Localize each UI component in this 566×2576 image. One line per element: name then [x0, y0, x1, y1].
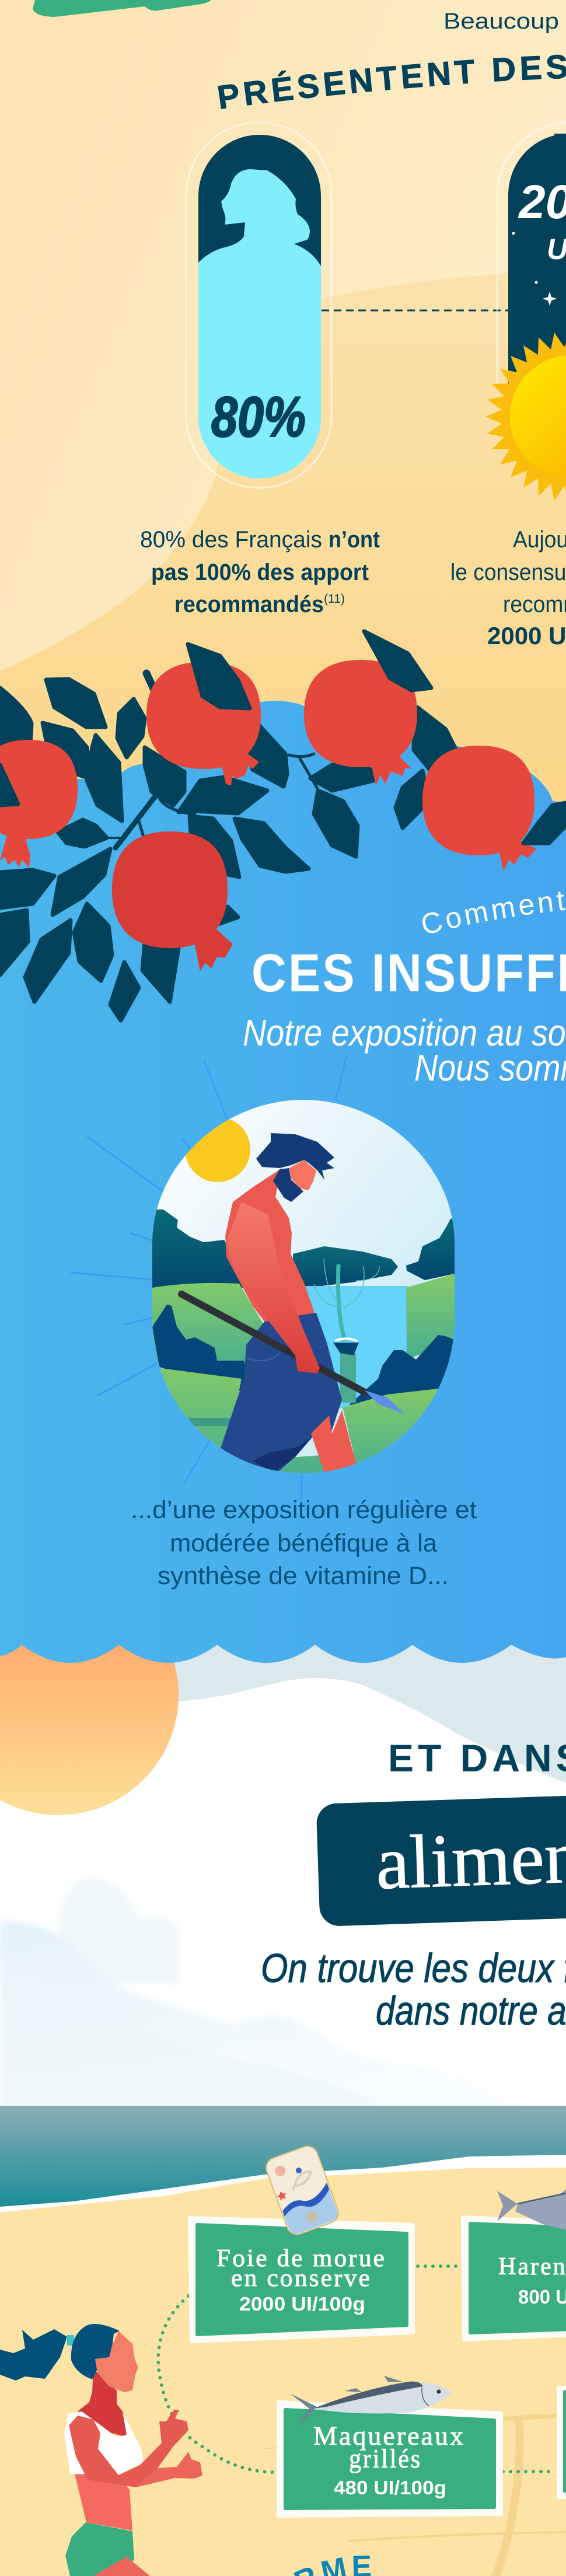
sky — [152, 1100, 455, 1473]
yellow sun — [185, 1117, 250, 1182]
man: shorts — [221, 1313, 342, 1476]
card: hareng — [463, 2217, 566, 2340]
pill ring — [497, 123, 566, 385]
clouds — [0, 1877, 516, 2107]
card: maquereaux: Maquereaux — [313, 2421, 465, 2451]
ponytail — [0, 2329, 67, 2381]
80% figure: 80% — [211, 385, 306, 449]
top — [64, 2411, 143, 2475]
sun — [485, 331, 566, 502]
caption: 80%: (11) — [324, 592, 345, 606]
runner — [0, 2324, 202, 2576]
icon: herring — [497, 2189, 566, 2230]
card: foie de morue: 2000 UI/100g — [239, 2293, 365, 2315]
pomegranate 1 — [0, 740, 78, 868]
blue scallops front — [0, 1564, 566, 1663]
arm — [69, 2410, 188, 2487]
card: maquereaux — [278, 2402, 501, 2516]
pill blue fill with silhouette — [198, 169, 321, 478]
caption: 80% — [140, 527, 380, 617]
man: hair — [256, 1133, 334, 1180]
pill ring — [186, 123, 331, 488]
caption: exposure: synthèse de vitamine D... — [158, 1562, 449, 1590]
forearm — [134, 2452, 202, 2487]
pomegranate 3 — [304, 660, 417, 785]
intro text: Beaucoup — [443, 9, 559, 34]
panel: 80% pill — [186, 123, 331, 488]
man: beard — [273, 1168, 303, 1202]
section title — [243, 892, 566, 1089]
caption: 80%: pas 100% des apport — [151, 560, 369, 585]
caption: 80%: n’ont — [329, 527, 380, 553]
white hill — [0, 1678, 566, 2112]
text: food sources — [261, 1945, 566, 2033]
scene landscape — [152, 1210, 455, 1476]
sky band below blue section — [0, 1599, 566, 1809]
head hair — [71, 2324, 120, 2379]
sea — [0, 2106, 566, 2217]
stars — [512, 232, 557, 306]
rays around scene — [71, 1056, 347, 1500]
pomegranate 2 — [146, 662, 261, 785]
pomegranate 4 — [422, 746, 536, 871]
caption: exposure: ...d’une exposition régulière et — [131, 1496, 477, 1524]
orange sun — [0, 1575, 179, 1815]
dark label: alimentation — [316, 1789, 566, 1927]
man: face — [289, 1160, 316, 1190]
card: foie de morue — [190, 2218, 413, 2341]
caption: 80%: recommandés — [174, 592, 324, 617]
man: arm — [226, 1202, 320, 1373]
pill dark — [508, 134, 566, 420]
leg — [93, 2557, 150, 2576]
pill dark top — [198, 135, 321, 268]
card: maquereaux: grillés — [349, 2444, 422, 2473]
card: edge of next item — [558, 2388, 566, 2497]
card: foie de morue: en conserve — [231, 2265, 372, 2292]
leaves behind fruit — [0, 679, 457, 1020]
card: foie de morue: Foie de morue — [216, 2245, 386, 2272]
caption: exposure: modérée bénéfique à la — [170, 1529, 437, 1557]
green shape top — [33, 0, 211, 17]
panel: 2000 UI pill — [485, 123, 566, 502]
caption: consensus — [450, 527, 566, 649]
card: maquereaux: 480 UI/100g — [334, 2477, 446, 2498]
man: torso — [225, 1168, 315, 1322]
leaves in front of fruit — [0, 631, 566, 843]
dashed connector — [322, 309, 508, 312]
dotted connectors — [158, 2266, 554, 2472]
neck — [78, 2369, 127, 2437]
spear — [181, 1294, 405, 1414]
sand lines — [263, 2416, 566, 2576]
value — [518, 185, 566, 259]
torso — [75, 2474, 132, 2530]
shorts — [65, 2522, 134, 2576]
illustration: man with spear — [152, 1100, 455, 1476]
foam and sand — [0, 2155, 566, 2576]
panel: blue section background — [0, 701, 566, 1610]
caption: exposure — [131, 1496, 477, 1590]
face — [95, 2331, 138, 2392]
caption: 80%: 80% des Français — [140, 527, 322, 553]
branches — [107, 673, 318, 848]
pomegranate 5 — [112, 831, 233, 971]
icon: tin can — [263, 2143, 341, 2238]
icon: mackerel — [290, 2376, 452, 2428]
man: leg — [311, 1410, 357, 1476]
background: upper sand — [0, 0, 566, 829]
background: dune — [0, 270, 566, 829]
